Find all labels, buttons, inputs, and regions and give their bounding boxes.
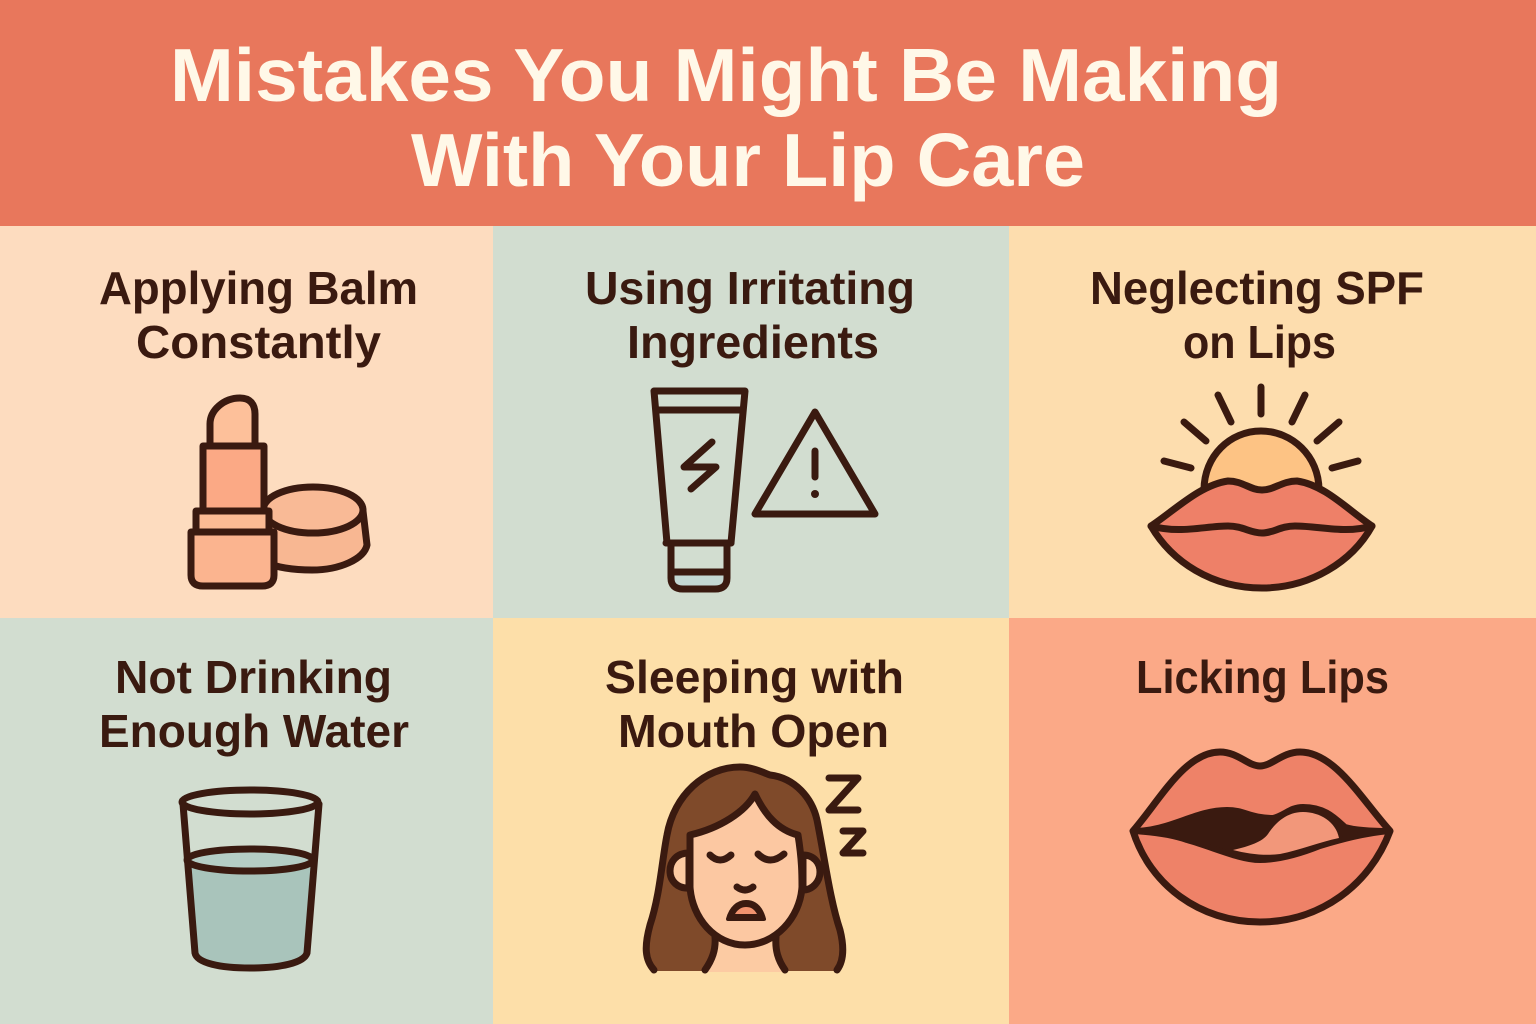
heading: irritating ingredients: Ingredients <box>627 316 879 368</box>
icon: glass of water <box>182 790 319 968</box>
title: With Your Lip Care <box>411 118 1085 202</box>
heading: not drinking: Enough Water <box>99 705 409 757</box>
heading: licking lips: Licking Lips <box>1136 651 1389 703</box>
heading: applying balm: Applying Balm <box>99 262 418 314</box>
heading: applying balm: Constantly <box>136 316 381 368</box>
icon: tongue licking lips <box>1133 752 1390 922</box>
panel: applying balm constantly <box>0 226 493 618</box>
header banner <box>0 0 1536 226</box>
heading: sleeping with mouth open <box>605 651 904 757</box>
panel: not drinking enough water <box>0 618 493 1024</box>
icon: lipstick and balm jar <box>191 398 367 586</box>
panel: licking lips <box>1009 618 1536 1024</box>
heading: not drinking: Not Drinking <box>115 651 392 703</box>
icon: tube with warning triangle <box>654 391 875 589</box>
heading: not drinking <box>99 651 409 757</box>
heading: neglecting spf: on Lips <box>1183 316 1336 368</box>
title: Mistakes You Might Be Making <box>170 33 1282 117</box>
heading: sleeping with mouth open: Mouth Open <box>618 705 889 757</box>
icon: sun rising behind lips <box>1151 387 1372 588</box>
panel: using irritating ingredients <box>493 226 1009 618</box>
heading: neglecting spf <box>1090 262 1424 368</box>
panel: neglecting spf on lips <box>1009 226 1536 618</box>
title <box>170 33 1282 202</box>
panel: sleeping with mouth open <box>493 618 1009 1024</box>
heading: sleeping with mouth open: Sleeping with <box>605 651 904 703</box>
heading: applying balm <box>99 262 418 368</box>
heading: neglecting spf: Neglecting SPF <box>1090 262 1424 314</box>
heading: irritating ingredients <box>585 262 915 368</box>
heading: irritating ingredients: Using Irritating <box>585 262 915 314</box>
icon: sleeping woman <box>646 767 863 972</box>
